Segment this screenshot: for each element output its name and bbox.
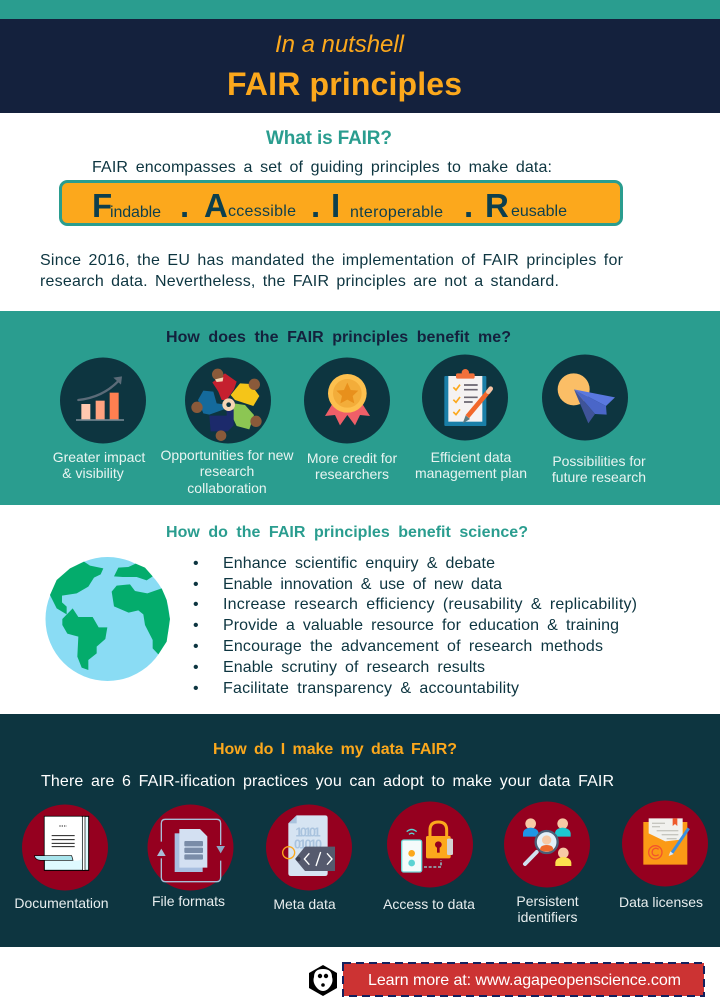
EU mandate text: Since 2016, the EU has mandated the implementation of FAIR principles for — [40, 252, 624, 269]
icon: access to data — [387, 802, 473, 888]
label: opportunities: research — [200, 463, 254, 479]
label: access to data: Access to data — [383, 896, 475, 912]
benefit list: • — [193, 596, 199, 613]
label: data management plan: management plan — [415, 465, 527, 481]
benefit list: Encourage the advancement of research methods — [223, 638, 603, 655]
title: FAIR principles — [227, 66, 462, 102]
benefit list: • — [193, 659, 199, 676]
label: greater impact: & visibility — [62, 465, 124, 481]
practices intro: There are 6 FAIR-ification practices you can adopt to make your data FAIR — [41, 773, 614, 790]
label: meta data: Meta data — [273, 896, 336, 912]
benefit list: Provide a valuable resource for education & training — [223, 617, 619, 634]
icon: medal — [304, 358, 390, 444]
heading: make data FAIR: How do I make my data FAIR? — [213, 741, 457, 758]
FAIR acronym box: . — [311, 187, 320, 224]
label: future research: future research — [552, 469, 646, 485]
icon: globe — [46, 557, 170, 681]
icon: meta data: 01010 — [294, 838, 322, 852]
learn more button — [343, 963, 704, 996]
benefit list: • — [193, 576, 199, 593]
FAIR acronym box: eusable — [511, 203, 567, 220]
FAIR acronym box: ccessible — [228, 203, 296, 220]
benefit list: Enhance scientific enquiry & debate — [223, 555, 495, 572]
icon: persistent identifiers — [504, 802, 590, 888]
heading: benefits to science: How do the FAIR principles benefit science? — [166, 524, 528, 541]
panel: benefits to science — [0, 505, 720, 714]
panel: make data FAIR — [0, 714, 720, 947]
FAIR acronym box: R — [485, 187, 509, 224]
learn more button: Learn more at: www.agapeopenscience.com — [368, 972, 681, 989]
label: persistent identifiers: identifiers — [518, 909, 577, 925]
benefit list — [193, 555, 637, 697]
label: documentation: Documentation — [14, 895, 109, 911]
icon: growth chart — [60, 358, 146, 444]
title banner — [0, 19, 720, 113]
intro text: FAIR encompasses a set of guiding principles to make data: — [92, 159, 552, 176]
icon: collaboration team — [185, 358, 271, 444]
FAIR acronym box: indable — [110, 204, 161, 221]
icon: checklist and pencil — [422, 354, 508, 440]
FAIR acronym box: nteroperable — [350, 204, 443, 221]
label: more credit: More credit for — [307, 450, 397, 466]
FAIR acronym box: I — [331, 187, 340, 224]
footer logo: monkey — [309, 965, 337, 996]
top teal strip — [0, 0, 720, 19]
label: opportunities: Opportunities for new — [160, 447, 294, 463]
label: file formats: File formats — [152, 893, 225, 909]
label: more credit: researchers — [315, 466, 389, 482]
label: data management plan: Efficient data — [431, 449, 512, 465]
benefit list: Facilitate transparency & accountability — [223, 680, 519, 697]
panel: what is FAIR — [0, 113, 720, 311]
FAIR acronym box: F — [92, 187, 112, 224]
benefit list: Increase research efficiency (reusability & replicability) — [223, 596, 637, 613]
icon: file formats — [148, 804, 234, 890]
EU mandate text — [40, 252, 624, 290]
heading: what is FAIR: What is FAIR? — [266, 128, 392, 149]
benefit list: Enable scrutiny of research results — [223, 659, 485, 676]
panel: benefits to me — [0, 311, 720, 505]
icon: documentation — [22, 804, 108, 890]
icon: data licenses — [622, 800, 708, 886]
subtitle: In a nutshell — [275, 31, 405, 58]
label: greater impact: Greater impact — [53, 449, 145, 465]
FAIR acronym box: A — [204, 187, 228, 224]
benefit list: • — [193, 638, 199, 655]
benefit list: • — [193, 680, 199, 697]
heading: benefits to me: How does the FAIR principles benefit me? — [166, 329, 511, 346]
label: persistent identifiers: Persistent — [516, 893, 579, 909]
label: data licenses: Data licenses — [619, 894, 703, 910]
FAIR acronym box: . — [464, 187, 473, 224]
label: future research: Possibilities for — [552, 453, 646, 469]
label: opportunities: collaboration — [187, 480, 267, 496]
benefit list: Enable innovation & use of new data — [223, 576, 502, 593]
FAIR acronym box — [60, 182, 622, 224]
icon: meta data: 10101 — [295, 826, 321, 840]
FAIR acronym box: . — [180, 187, 189, 224]
benefit list: • — [193, 617, 199, 634]
benefit list: • — [193, 555, 199, 572]
EU mandate text: research data. Nevertheless, the FAIR principles are not a standard. — [40, 273, 559, 290]
icon: meta data — [266, 804, 352, 890]
icon: paper plane — [542, 354, 628, 440]
